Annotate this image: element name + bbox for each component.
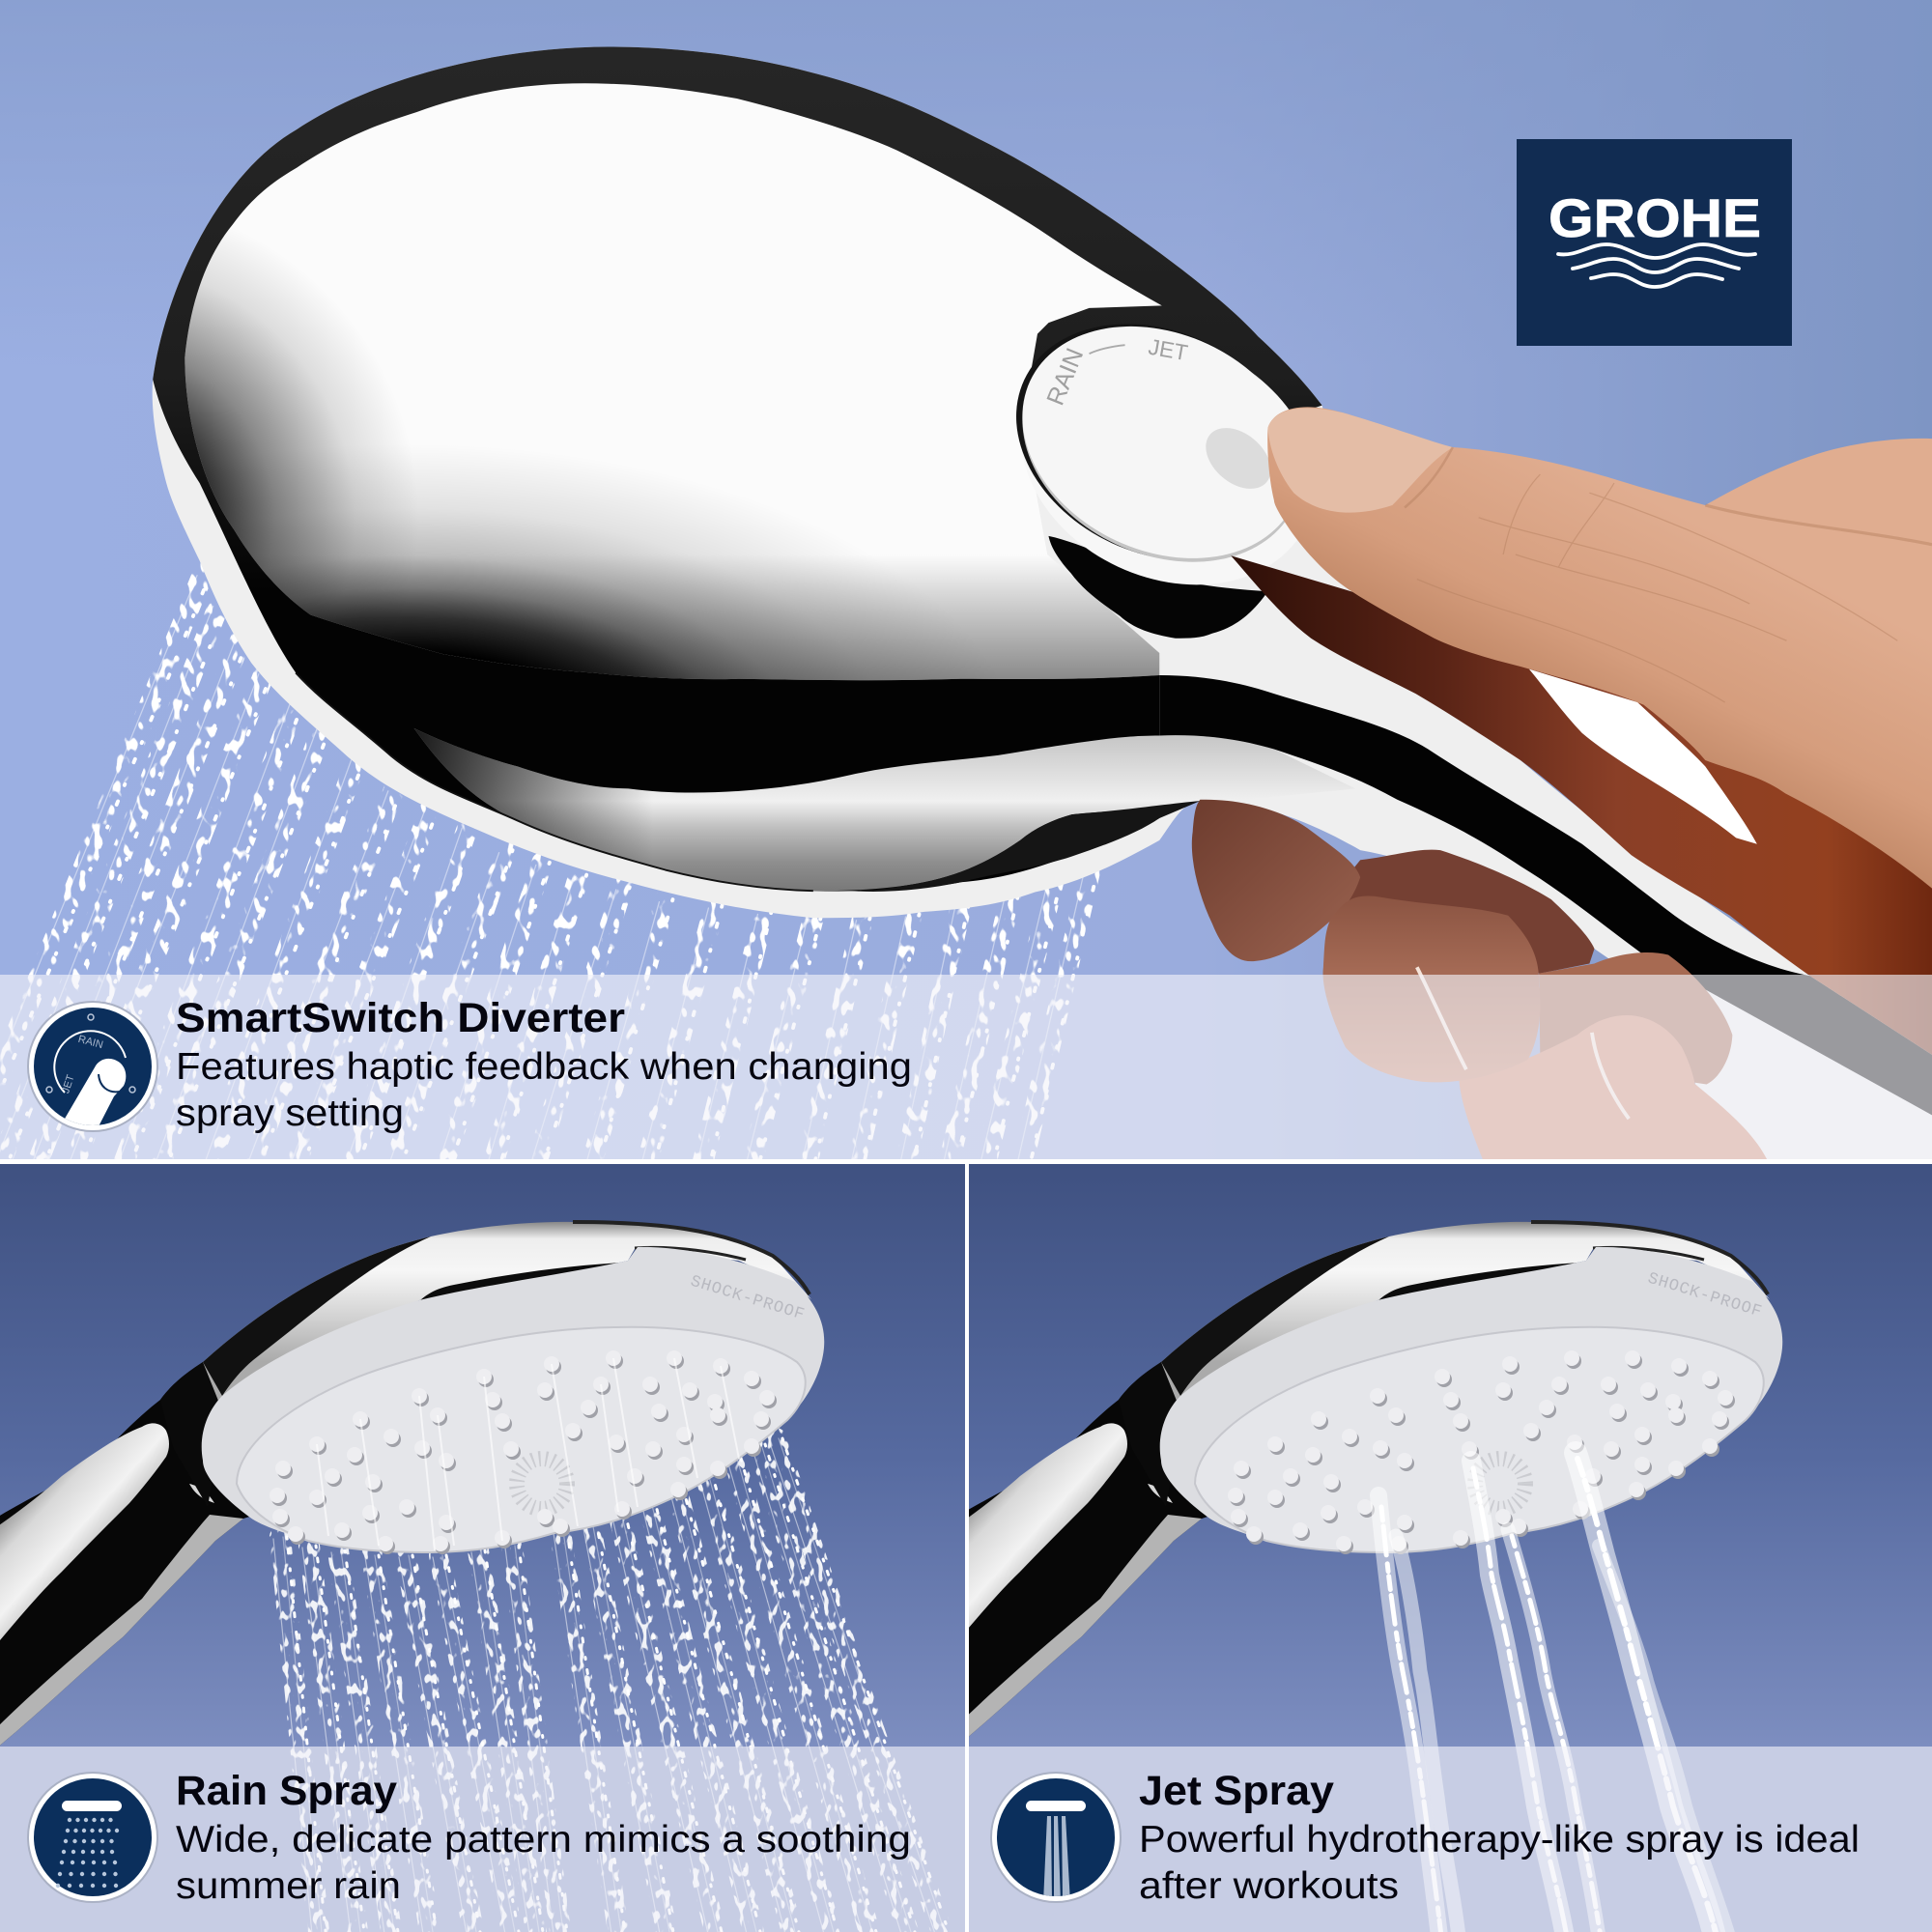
description: after workouts xyxy=(1139,1865,1399,1907)
icon: finger on switch xyxy=(27,1001,158,1132)
handle black reflection xyxy=(1159,675,1932,1115)
description: summer rain xyxy=(176,1865,401,1907)
logo wordmark: GROHE xyxy=(1548,187,1761,248)
SmartSwitch button xyxy=(1016,325,1289,585)
embossed SHOCK-PROOF text: SHOCK-PROOF xyxy=(1645,1270,1763,1321)
panel: jet spray photo xyxy=(949,1164,1932,1932)
caption band xyxy=(0,975,1932,1159)
rain spray water xyxy=(273,1438,949,1932)
dark chrome shell xyxy=(153,46,1322,892)
photo: hand shower with water xyxy=(0,46,1932,1167)
heading: Jet Spray xyxy=(1139,1768,1334,1814)
caption band xyxy=(969,1747,1932,1932)
icon: jet spray xyxy=(990,1772,1122,1903)
description xyxy=(176,1819,911,1907)
description: Wide, delicate pattern mimics a soothing xyxy=(176,1819,911,1861)
hand shower head xyxy=(949,1222,1782,1753)
palm in shadow xyxy=(1231,555,1932,1055)
water spray xyxy=(0,573,1097,1167)
black recess under switch xyxy=(1048,536,1267,639)
polished bulb xyxy=(185,83,1162,680)
caption: Rain Spray xyxy=(27,1768,911,1907)
caption: Jet Spray xyxy=(990,1768,1860,1907)
panel: SmartSwitch diverter photo xyxy=(0,0,1932,1167)
description xyxy=(1139,1819,1860,1907)
icon: rain spray xyxy=(27,1772,158,1903)
background sky xyxy=(0,0,1932,1159)
heading: SmartSwitch Diverter xyxy=(176,995,625,1041)
background xyxy=(0,1164,965,1932)
GROHE logo xyxy=(1517,139,1792,346)
switch label: RAIN: RAIN xyxy=(1042,345,1089,410)
description: Features haptic feedback when changing xyxy=(176,1046,912,1088)
icon: finger on switch: JET xyxy=(60,1073,77,1094)
thumbnail xyxy=(1267,408,1453,513)
rim line xyxy=(296,672,813,891)
panel: rain spray photo xyxy=(0,1164,965,1932)
switch label: JET: JET xyxy=(1147,334,1190,365)
description xyxy=(176,1046,912,1134)
thumb and hand xyxy=(1267,407,1932,889)
finger crease and skin wrinkles xyxy=(1405,447,1932,702)
description: Powerful hydrotherapy-like spray is ideal xyxy=(1139,1819,1860,1861)
water lines on face xyxy=(317,1358,739,1550)
light gap between fingers xyxy=(1529,669,1757,844)
embossed SHOCK-PROOF text: SHOCK-PROOF xyxy=(688,1273,806,1324)
heading: Rain Spray xyxy=(176,1768,397,1814)
chrome lower lobe xyxy=(414,728,1355,891)
caption: SmartSwitch Diverter xyxy=(27,995,912,1134)
hand shower head xyxy=(0,1222,824,1753)
icon: finger on switch: RAIN xyxy=(76,1034,104,1051)
description: spray setting xyxy=(176,1093,404,1134)
jet streams xyxy=(1378,1453,1729,1932)
dark strip under head xyxy=(850,801,1200,892)
background xyxy=(969,1164,1932,1932)
shower head body xyxy=(153,46,1932,1164)
logo waves xyxy=(1558,244,1755,287)
lower fingers xyxy=(1192,800,1770,1164)
caption band xyxy=(0,1747,965,1932)
